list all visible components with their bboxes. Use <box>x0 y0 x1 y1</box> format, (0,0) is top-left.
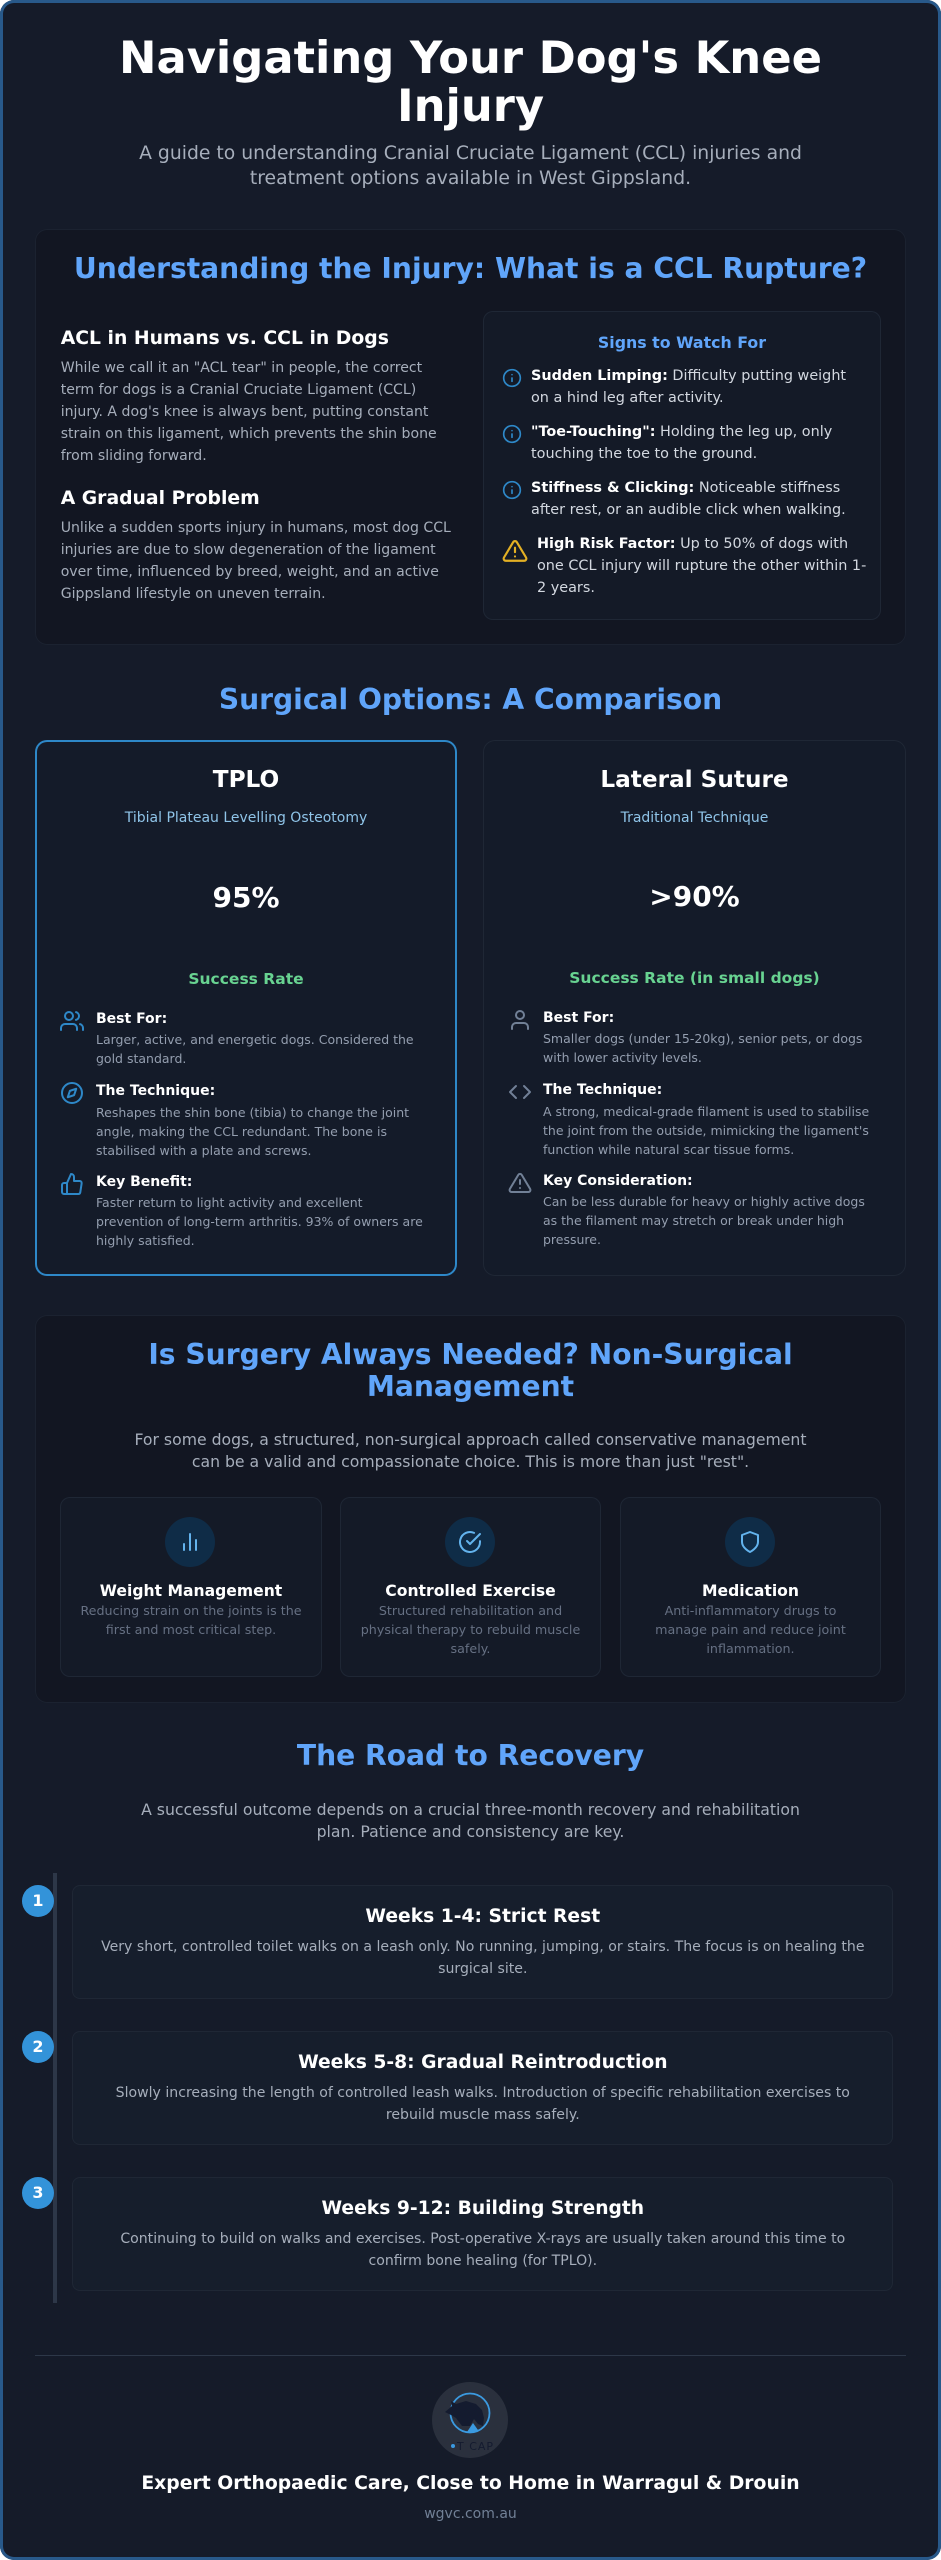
card: weight management <box>60 1497 322 1677</box>
card text: safely. <box>451 1641 490 1656</box>
subtitle <box>139 142 802 188</box>
card text: Anti-inflammatory drugs to <box>665 1603 836 1618</box>
text: key consideration: pressure. <box>543 1232 601 1247</box>
row: key consideration <box>508 1172 865 1247</box>
heading: non-surgical management: Is Surgery Always Needed? Non-Surgical <box>148 1338 793 1371</box>
text: key benefit: highly satisfied. <box>96 1233 195 1248</box>
text: ACL vs CCL: strain on this ligament, which prevents the shin bone <box>61 426 437 442</box>
panel: signs to watch for <box>483 311 881 620</box>
text: toe touching: touching the toe to the ground. <box>531 446 757 462</box>
card text: first and most critical step. <box>106 1622 276 1637</box>
text: gradual problem: Gippsland lifestyle on uneven terrain. <box>61 586 326 602</box>
text: sudden limping <box>531 368 846 406</box>
step title: Weeks 9-12: Building Strength <box>321 2198 644 2219</box>
heading: signs to watch for: Signs to Watch For <box>598 332 766 352</box>
card text: Structured rehabilitation and <box>379 1603 562 1618</box>
text: best for: gold standard. <box>96 1051 186 1066</box>
intro text <box>134 1430 807 1470</box>
text: the technique: the joint from the outside, mimicking the ligament's <box>543 1123 869 1138</box>
step number <box>22 2177 54 2209</box>
text: the technique <box>96 1083 409 1158</box>
card text: physical therapy to rebuild muscle <box>361 1622 580 1637</box>
card: medication <box>620 1497 881 1677</box>
footer tagline: Expert Orthopaedic Care, Close to Home in Warragul & Drouin <box>141 2473 800 2494</box>
step text: confirm bone healing (for TPLO). <box>368 2253 597 2269</box>
row: best for <box>60 1010 414 1066</box>
text: ACL vs CCL: from sliding forward. <box>61 448 207 464</box>
step number: 2 <box>32 2037 44 2056</box>
step text: Very short, controlled toilet walks on a leash only. No running, jumping, or stairs. The focus is on healing the <box>101 1939 865 1955</box>
text: the technique: angle, making the CCL redundant. The bone is <box>96 1124 387 1139</box>
title: Navigating Your Dog's Knee <box>119 30 822 84</box>
text: gradual problem: over time, influenced by breed, weight, and an active <box>61 564 439 580</box>
text: key benefit: Faster return to light activity and excellent <box>96 1195 363 1210</box>
step 1 <box>22 1885 894 1999</box>
step number <box>22 1885 54 1917</box>
icon: check circle <box>445 1517 495 1567</box>
card subtitle: Tibial Plateau Levelling Osteotomy <box>125 810 367 826</box>
card title: TPLO: TPLO <box>213 766 279 793</box>
heading: non-surgical management: Management <box>367 1370 574 1403</box>
panel: TPLO card <box>35 740 457 1276</box>
icon: info <box>502 480 522 500</box>
text: the technique: The Technique: <box>96 1083 215 1099</box>
icon: warning triangle <box>502 540 528 562</box>
row: key benefit <box>61 1173 423 1248</box>
step number: 3 <box>32 2183 44 2202</box>
text: key benefit <box>96 1174 423 1248</box>
text: key benefit: prevention of long-term arthritis. 93% of owners are <box>96 1214 423 1229</box>
card: controlled exercise <box>340 1497 601 1677</box>
text: high risk factor: High Risk Factor: Up to 50% of dogs with <box>537 536 848 552</box>
step text: Continuing to build on walks and exercises. Post-operative X-rays are usually taken around this time to <box>120 2231 845 2247</box>
stat label: Success Rate <box>188 970 304 988</box>
sign: high risk factor <box>502 536 866 596</box>
card title: Medication <box>702 1582 799 1600</box>
text: ACL vs CCL: term for dogs is a Cranial Cruciate Ligament (CCL) <box>61 382 416 398</box>
text: the technique: The Technique: <box>543 1082 662 1098</box>
text: the technique <box>543 1082 869 1157</box>
icon: info <box>502 368 522 388</box>
step card <box>72 1885 893 1999</box>
text: stiffness and clicking <box>531 480 846 518</box>
text: ACL vs CCL: While we call it an "ACL tear" in people, the correct <box>61 360 422 376</box>
text: key consideration <box>543 1172 865 1247</box>
text: best for: Best For: <box>96 1010 167 1026</box>
text: the technique: function while natural scar tissue forms. <box>543 1142 794 1157</box>
icon: compass <box>61 1082 83 1104</box>
step title: Weeks 5-8: Gradual Reintroduction <box>298 2052 668 2073</box>
sign: sudden limping <box>502 368 846 406</box>
step number <box>22 2031 54 2063</box>
row: the technique <box>61 1082 409 1158</box>
step number: 1 <box>32 1891 44 1910</box>
stat: >90%: >90% <box>649 880 740 913</box>
stat label: Success Rate (in small dogs) <box>569 968 820 986</box>
icon: clinic logo: T CAP <box>456 2440 494 2453</box>
text: best for <box>543 1010 862 1065</box>
step text: rebuild muscle mass safely. <box>386 2107 580 2123</box>
step 3 <box>22 2177 894 2291</box>
text: ACL vs CCL: injury. A dog's knee is always bent, putting constant <box>61 404 428 420</box>
text: stiffness and clicking: Stiffness & Clicking: Noticeable stiffness <box>531 480 840 496</box>
step 2 <box>22 2031 894 2145</box>
intro text: can be a valid and compassionate choice. This is more than just "rest". <box>192 1452 749 1470</box>
icon: code chevrons <box>509 1085 531 1099</box>
text: best for <box>96 1010 414 1066</box>
step text <box>72 2082 893 2126</box>
card text: Reducing strain on the joints is the <box>80 1603 302 1618</box>
subtitle: treatment options available in West Gippsland. <box>250 168 691 188</box>
panel: lateral suture card <box>483 740 906 1276</box>
sign: stiffness and clicking <box>502 480 846 518</box>
card text: inflammation. <box>706 1641 795 1656</box>
text: the technique: stabilised with a plate and screws. <box>96 1143 311 1158</box>
icon: bar chart <box>165 1517 215 1567</box>
subtitle: A guide to understanding Cranial Cruciate Ligament (CCL) injuries and <box>139 142 802 164</box>
card title: Controlled Exercise <box>385 1582 556 1600</box>
panel: non-surgical management <box>35 1315 906 1703</box>
icon: user <box>511 1010 529 1030</box>
intro text: For some dogs, a structured, non-surgical approach called conservative management <box>134 1430 807 1448</box>
recovery intro text: plan. Patience and consistency are key. <box>317 1822 624 1840</box>
icon: users <box>60 1011 84 1031</box>
text: best for: with lower activity levels. <box>543 1050 702 1065</box>
card text <box>361 1603 580 1656</box>
subheading: gradual problem: A Gradual Problem <box>61 488 260 508</box>
heading: surgical options: Surgical Options: A Comparison <box>219 683 722 716</box>
icon: warning triangle <box>508 1172 532 1193</box>
step card <box>72 2031 893 2145</box>
step text: Slowly increasing the length of controlled leash walks. Introduction of specific rehabilitation exercises to <box>116 2085 850 2101</box>
row: best for <box>511 1010 862 1065</box>
text: gradual problem: injuries are due to slow degeneration of the ligament <box>61 542 436 558</box>
footer <box>35 2355 906 2531</box>
text: high risk factor: one CCL injury will rupture the other within 1- <box>537 558 866 574</box>
text: stiffness and clicking: after rest, or an audible click when walking. <box>531 502 846 518</box>
step title: Weeks 1-4: Strict Rest <box>365 1906 600 1927</box>
sign: toe touching <box>502 424 832 462</box>
text: the technique: Reshapes the shin bone (tibia) to change the joint <box>96 1104 409 1120</box>
card subtitle: Traditional Technique <box>621 810 768 826</box>
card text <box>80 1603 302 1637</box>
card title: lateral suture: Lateral Suture <box>600 766 789 793</box>
heading: non-surgical management <box>148 1338 793 1403</box>
text: gradual problem <box>61 520 451 602</box>
icon: info <box>502 424 522 444</box>
text: best for: Best For: <box>543 1010 614 1026</box>
card text: manage pain and reduce joint <box>655 1622 846 1637</box>
recovery intro text: A successful outcome depends on a crucial three-month recovery and rehabilitation <box>141 1800 800 1818</box>
icon: clinic logo <box>432 2382 508 2458</box>
text: toe touching: "Toe-Touching": Holding the leg up, only <box>531 424 832 440</box>
card text <box>655 1603 846 1656</box>
text: sudden limping: Sudden Limping: Difficulty putting weight <box>531 368 846 384</box>
step text <box>72 1936 893 1980</box>
text: toe touching <box>531 424 832 462</box>
step text: surgical site. <box>438 1961 527 1977</box>
icon: shield <box>725 1517 775 1567</box>
recovery intro text <box>141 1800 800 1840</box>
footer website: wgvc.com.au <box>424 2506 517 2522</box>
step text <box>72 2228 893 2272</box>
text: high risk factor <box>537 536 866 596</box>
text: sudden limping: on a hind leg after activity. <box>531 390 724 406</box>
icon: thumbs up <box>61 1173 83 1195</box>
text: ACL vs CCL <box>61 360 437 464</box>
text: best for: Larger, active, and energetic dogs. Considered the <box>96 1032 414 1047</box>
stat: 95%: 95% <box>212 881 280 914</box>
text: the technique: A strong, medical-grade filament is used to stabilise <box>543 1104 869 1118</box>
card title: Weight Management <box>100 1582 282 1600</box>
panel: understanding the injury <box>35 229 906 645</box>
heading: understanding the injury: Understanding the Injury: What is a CCL Rupture? <box>74 252 867 285</box>
text: gradual problem: Unlike a sudden sports injury in humans, most dog CCL <box>61 520 451 536</box>
text: key consideration: as the filament may stretch or break under high <box>543 1213 844 1228</box>
subheading: ACL vs CCL: ACL in Humans vs. CCL in Dogs <box>61 328 389 348</box>
text: key benefit: Key Benefit: <box>96 1174 192 1190</box>
timeline <box>22 1873 894 2303</box>
row: the technique <box>509 1082 869 1157</box>
title <box>119 30 822 132</box>
text: key consideration: Can be less durable for heavy or highly active dogs <box>543 1194 865 1209</box>
step card <box>72 2177 893 2291</box>
text: high risk factor: 2 years. <box>537 580 595 596</box>
heading: road to recovery: The Road to Recovery <box>297 1739 644 1772</box>
text: key consideration: Key Consideration: <box>543 1172 693 1188</box>
title: Injury <box>397 78 544 132</box>
text: best for: Smaller dogs (under 15-20kg), senior pets, or dogs <box>543 1031 862 1046</box>
